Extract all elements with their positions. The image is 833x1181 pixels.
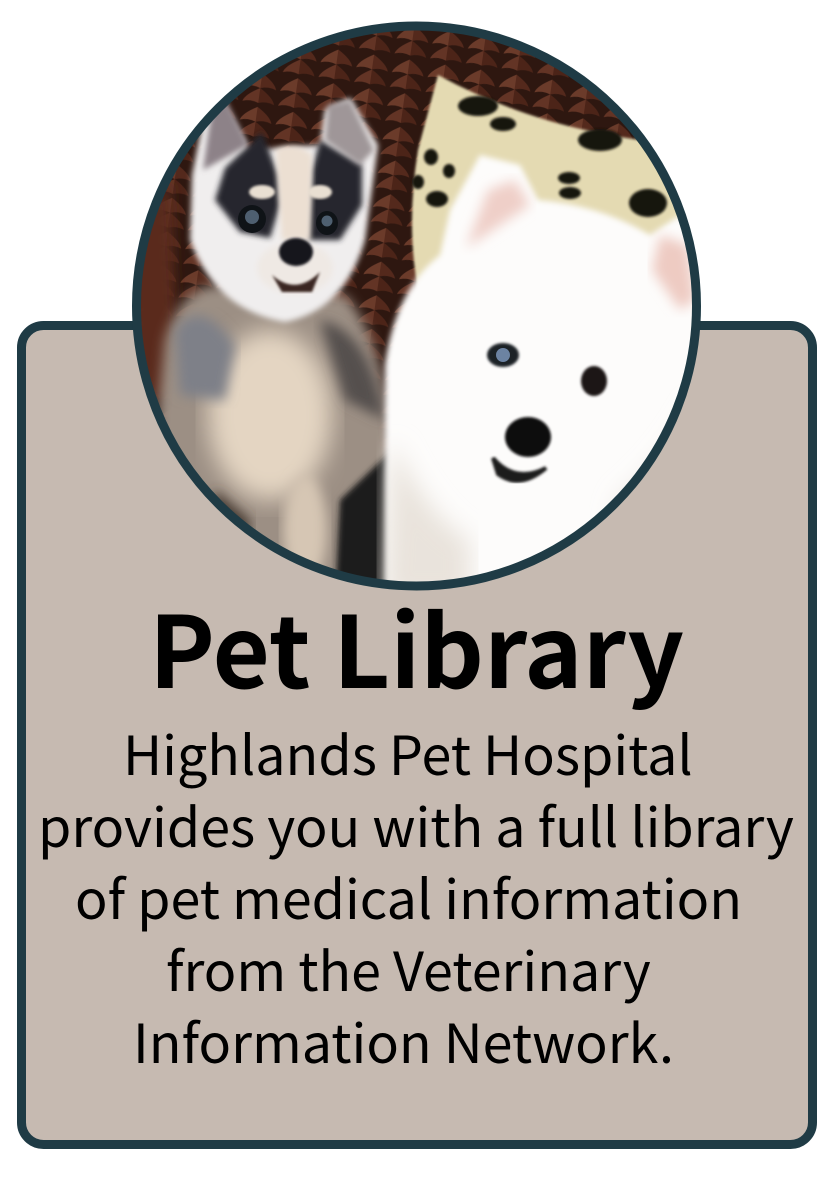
photo: two puppies in circular frame [132,22,701,590]
left puppy [152,94,388,580]
dark reddish chair edge [141,192,180,402]
body text: from the Veterinary [166,930,651,1007]
body text: of pet medical information [75,858,742,935]
right puppy [385,155,705,600]
pillow [410,74,679,284]
heading: Pet Library [149,573,684,717]
body text: provides you with a full library [38,786,794,863]
body text [38,714,794,1079]
body text: Information Network. [133,1002,674,1079]
body text: Highlands Pet Hospital [123,714,693,791]
